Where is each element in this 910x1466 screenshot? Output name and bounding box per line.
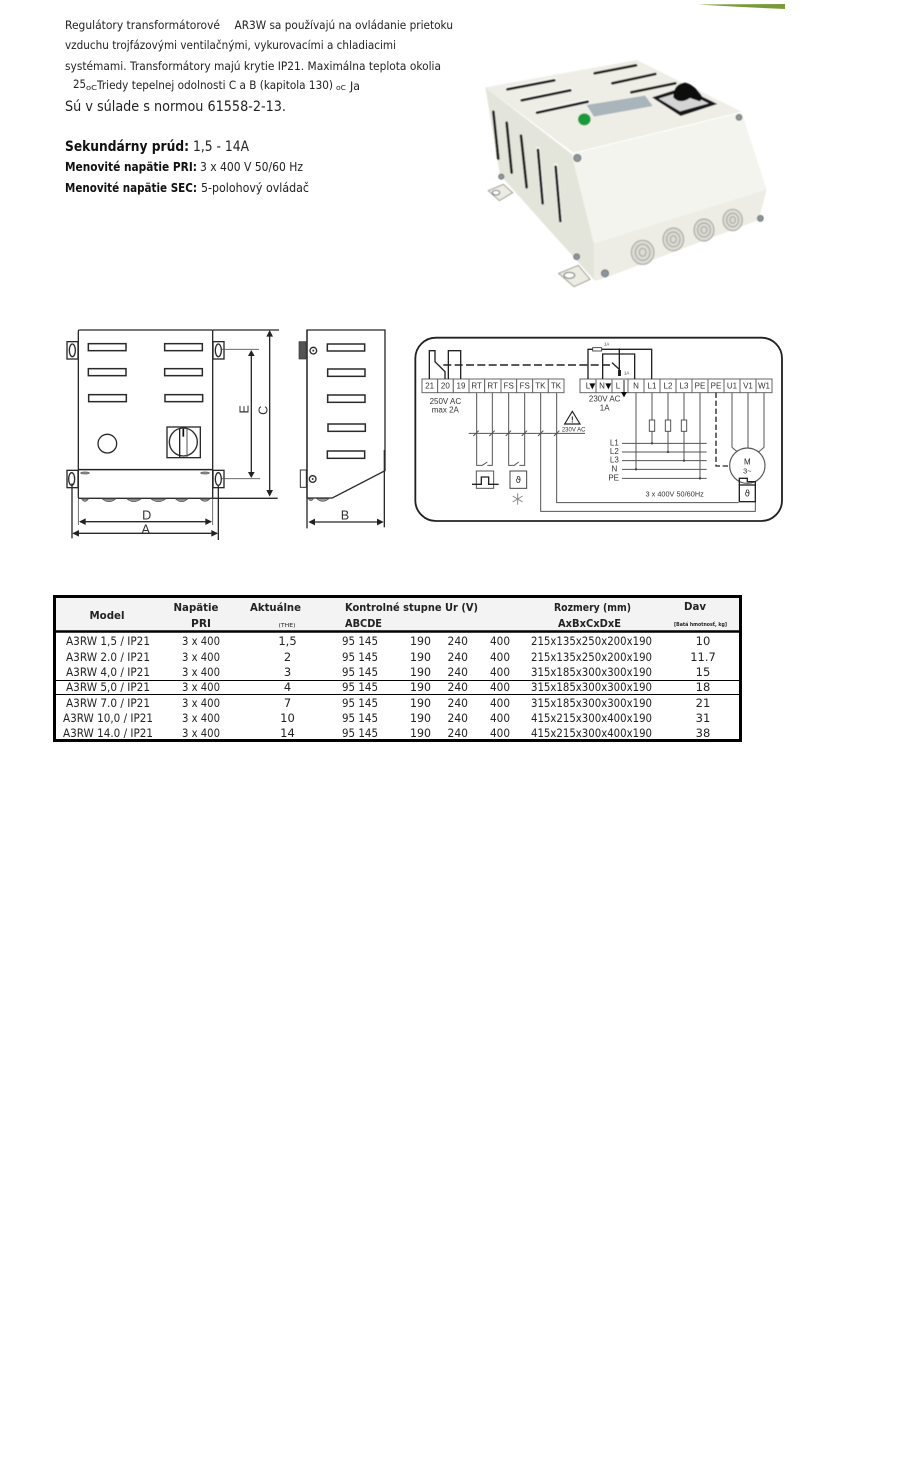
description text block: AR3W sa používajú na ovládanie prietoku <box>234 18 453 32</box>
warning triangle: ! <box>571 416 574 425</box>
table rows: 3 x 400 <box>182 711 220 725</box>
table rows: A3RW 7.0 / IP21 <box>66 696 150 710</box>
table rows: 240 <box>448 650 468 664</box>
terminal blocks: 19 <box>457 382 466 391</box>
dimension lines A D E C <box>72 330 279 540</box>
wiring labels: L2 <box>610 447 619 456</box>
side view enclosure <box>299 330 385 528</box>
table rows: 95 145 <box>342 665 378 679</box>
table rows: A3RW 1,5 / IP21 <box>66 634 150 648</box>
table rows: 95 145 <box>342 726 378 740</box>
table rows: 415x215x300x400x190 <box>531 726 652 740</box>
specifications text block: Menovité napätie PRI: <box>65 160 197 174</box>
table rows: 21 <box>696 696 710 710</box>
terminal blocks: RT <box>471 382 482 391</box>
specifications text block: 5-polohový ovládač <box>201 181 309 195</box>
product photo: transformer controller box <box>485 60 767 287</box>
table rows: 11.7 <box>690 650 716 664</box>
wiring labels: 1A <box>600 403 610 412</box>
table rows: 240 <box>448 696 468 710</box>
motor symbol <box>730 448 765 502</box>
table rows: 2 <box>284 650 291 664</box>
terminal blocks: V1 <box>743 382 753 391</box>
table rows: 400 <box>490 726 510 740</box>
table rows: 3 x 400 <box>182 665 220 679</box>
table rows: 315x185x300x300x190 <box>531 680 652 694</box>
dimension letters <box>141 405 349 536</box>
description text block: systémami. Transformátory majú krytie IP21. Maximálna teplota okolia <box>65 59 441 73</box>
specifications text block <box>65 139 309 195</box>
table header labels: Rozmery (mm) <box>554 601 631 614</box>
table rows: 400 <box>490 696 510 710</box>
specifications text block: 3 x 400 V 50/60 Hz <box>200 160 303 174</box>
table header labels: Kontrolné stupne Ur (V) <box>345 601 478 614</box>
terminal blocks: L <box>616 382 621 391</box>
description text block: Triedy tepelnej odolnosti C a B (kapitola 130) <box>96 78 333 92</box>
terminal blocks: L1 <box>648 382 657 391</box>
motor symbol: ϑ <box>745 490 750 500</box>
table rows: 190 <box>410 711 431 725</box>
table rows: 240 <box>448 665 468 679</box>
wiring labels: 250V AC <box>430 397 461 406</box>
table rows: A3RW 2.0 / IP21 <box>66 650 150 664</box>
wiring labels: 1A <box>604 341 609 346</box>
table rows: 190 <box>410 680 431 694</box>
dimension letters: D <box>142 508 151 522</box>
table rows: 38 <box>696 726 710 740</box>
terminal blocks <box>422 379 772 393</box>
wiring labels: 230V AC <box>589 395 621 404</box>
table rows: 400 <box>490 680 510 694</box>
specification table <box>54 596 740 740</box>
table rows: A3RW 5,0 / IP21 <box>66 680 150 694</box>
table rows: 240 <box>448 634 468 648</box>
wiring labels: PE <box>608 474 619 483</box>
table rows: 18 <box>696 680 710 694</box>
table rows: 400 <box>490 711 510 725</box>
table rows: 3 x 400 <box>182 634 220 648</box>
table rows: 215x135x250x200x190 <box>531 650 652 664</box>
table rows: 190 <box>410 650 431 664</box>
description text block: oC <box>86 84 97 92</box>
table rows: 190 <box>410 634 431 648</box>
table rows: 31 <box>696 711 710 725</box>
table header labels <box>90 600 727 630</box>
table rows: 95 145 <box>342 650 378 664</box>
table rows: 240 <box>448 680 468 694</box>
table rows: 95 145 <box>342 696 378 710</box>
terminal blocks: PE <box>695 382 705 391</box>
table rows: 3 x 400 <box>182 680 220 694</box>
specifications text block: Sekundárny prúd: <box>65 139 189 155</box>
terminal blocks: U1 <box>727 382 738 391</box>
table header labels: Napätie <box>174 601 218 614</box>
thermostat and frost symbols: ϑ <box>516 476 521 486</box>
description text block: 25 <box>73 77 86 91</box>
table rows: 240 <box>448 711 468 725</box>
wiring labels: N <box>611 464 617 473</box>
table rows: 10 <box>696 634 710 648</box>
table header labels: AxBxCxDxE <box>558 617 621 630</box>
table rows: 15 <box>696 665 710 679</box>
table rows: 190 <box>410 726 431 740</box>
table rows: 3 <box>284 665 291 679</box>
wires <box>429 348 764 511</box>
terminal blocks: L3 <box>680 382 689 391</box>
specifications text block: Menovité napätie SEC: <box>65 181 197 195</box>
table rows: 240 <box>448 726 468 740</box>
table rows: 14 <box>280 726 295 740</box>
wiring labels: max 2A <box>432 406 460 415</box>
table rows: 400 <box>490 665 510 679</box>
table rows: 3 x 400 <box>182 726 220 740</box>
table rows: 4 <box>284 680 291 694</box>
table rows: 400 <box>490 650 510 664</box>
dimension letters: A <box>141 522 150 536</box>
terminal blocks: W1 <box>758 382 771 391</box>
terminal blocks: L <box>586 382 591 391</box>
table rows: 315x185x300x300x190 <box>531 696 652 710</box>
table frame and rules <box>54 596 740 740</box>
description text block <box>65 18 453 115</box>
dimension drawing: front and side views <box>67 330 385 540</box>
table rows: 3 x 400 <box>182 696 220 710</box>
table rows: 95 145 <box>342 711 378 725</box>
table rows: 95 145 <box>342 634 378 648</box>
wiring diagram <box>415 338 782 521</box>
terminal blocks: N <box>599 382 605 391</box>
wiring labels: 230V AC <box>562 427 586 433</box>
terminal blocks: N <box>633 382 639 391</box>
wiring labels: 3 x 400V 50/60Hz <box>646 490 704 499</box>
description text block: Regulátory transformátorové <box>65 18 220 32</box>
dimension letters: C <box>257 406 271 415</box>
table header labels: [Batá hmotnosť, kg] <box>674 621 727 628</box>
thermostat and frost symbols <box>472 471 527 505</box>
table rows: A3RW 14.0 / IP21 <box>63 726 153 740</box>
table rows: 3 x 400 <box>182 650 220 664</box>
table rows: 215x135x250x200x190 <box>531 634 652 648</box>
table rows: 400 <box>490 634 510 648</box>
front view enclosure <box>67 330 224 502</box>
terminal blocks: PE <box>711 382 721 391</box>
terminal blocks: RT <box>487 382 498 391</box>
table rows: 1,5 <box>278 634 297 648</box>
dimension letters: B <box>341 508 349 522</box>
wiring labels <box>430 341 704 499</box>
table rows <box>63 634 716 740</box>
table rows: 415x215x300x400x190 <box>531 711 652 725</box>
decorative green corner mark <box>698 4 785 9</box>
table header labels: (THE) <box>278 623 296 629</box>
description text block: Sú v súlade s normou 61558-2-13. <box>65 99 286 115</box>
terminal blocks: 20 <box>441 382 450 391</box>
table rows: 190 <box>410 665 431 679</box>
terminal blocks: FS <box>520 382 530 391</box>
terminal blocks: L2 <box>664 382 673 391</box>
diagram outline <box>415 338 782 521</box>
table header background <box>55 597 740 631</box>
description text block: vzduchu trojfázovými ventilačnými, vykurovacími a chladiacimi <box>65 38 396 52</box>
table header labels: Dav <box>684 600 707 613</box>
table rows: 315x185x300x300x190 <box>531 665 652 679</box>
description text block: oC <box>336 84 346 92</box>
table rows: 10 <box>280 711 295 725</box>
dimension letters: E <box>237 405 251 414</box>
table rows: 95 145 <box>342 680 378 694</box>
table header labels: Aktuálne <box>250 601 301 614</box>
table header labels: Model <box>90 609 124 622</box>
warning triangle <box>565 411 580 425</box>
terminal blocks: 21 <box>425 382 435 391</box>
table rows: 7 <box>284 696 291 710</box>
specifications text block: 1,5 - 14A <box>193 139 249 155</box>
terminal blocks: TK <box>535 382 546 391</box>
terminal blocks: TK <box>551 382 562 391</box>
wiring labels: L3 <box>610 456 619 465</box>
wiring labels: 1A <box>624 370 629 375</box>
table rows: 190 <box>410 696 431 710</box>
motor symbol: 3~ <box>743 467 752 476</box>
wiring labels: L1 <box>610 438 619 447</box>
table rows: A3RW 10,0 / IP21 <box>63 711 153 725</box>
description text block: Ja <box>349 79 360 93</box>
table rows: A3RW 4,0 / IP21 <box>66 665 150 679</box>
table header labels: ABCDE <box>345 617 382 630</box>
table header labels: PRI <box>191 617 211 630</box>
motor symbol: M <box>744 457 751 466</box>
terminal blocks: FS <box>504 382 514 391</box>
